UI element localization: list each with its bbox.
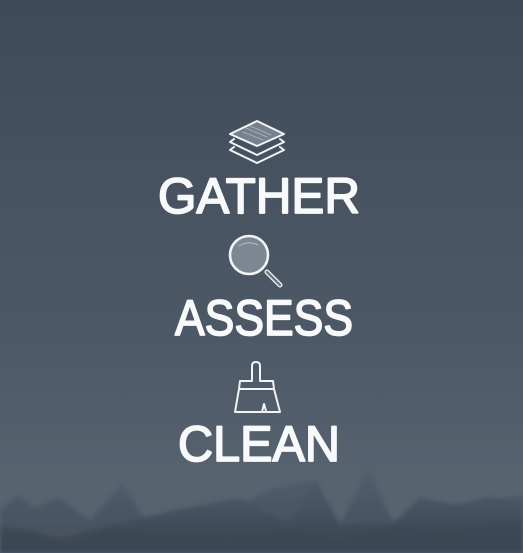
icon: magnifying glass	[230, 236, 280, 285]
icon: brush	[235, 362, 280, 412]
heading: ASSESS: ASSESS	[175, 290, 353, 346]
icon: stack of papers	[230, 121, 284, 163]
mountains: near range	[0, 482, 523, 553]
mountains: far range	[0, 470, 523, 553]
heading: CLEAN: CLEAN	[178, 416, 340, 472]
heading: GATHER: GATHER	[158, 168, 360, 224]
